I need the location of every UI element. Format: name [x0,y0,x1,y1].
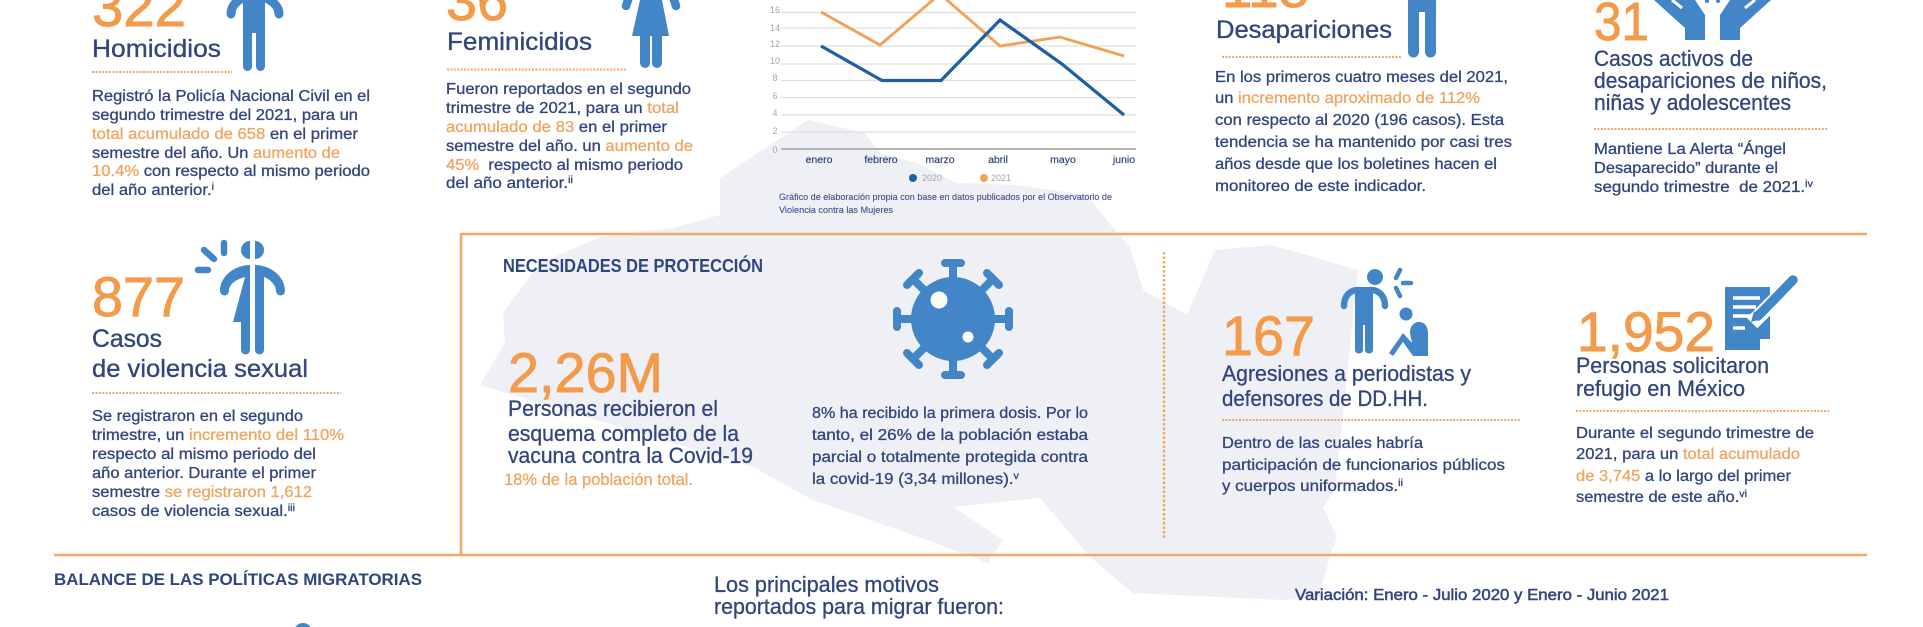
text: feminicidios description: acumulado de 83 en el primer [446,119,667,136]
heading: casos activos [1594,46,1827,115]
text: agresiones description: ii [1398,478,1403,489]
series 2020 [821,20,1124,115]
chart y axis labels: 8 [772,73,778,83]
icon: woman [626,0,676,68]
chart y axis labels: 2 [772,126,778,136]
heading: motivos: Los principales motivos [714,572,939,597]
text: homicidios description: Registró la Policía Nacional Civil en el [92,88,370,105]
icon: person head [294,623,312,627]
heading: feminicidios: Feminicidios [447,28,592,56]
chart y axis labels: 16 [770,5,780,15]
text: violencia description: año anterior. Durante el primer [92,465,316,482]
text: dosis description [812,405,1088,488]
chart y axis labels: 12 [770,39,780,49]
chart y axis labels: 10 [770,56,780,66]
text: feminicidios description: trimestre de 2021, para un total [446,100,679,117]
icon: virus [897,263,1009,375]
text: refugio description: de 3,745 a lo largo del primer [1576,468,1791,485]
text: feminicidios description: 45% respecto al mismo periodo [446,157,683,174]
icon: aggression [1344,269,1428,356]
panel frame: necesidades de protección [461,234,1867,555]
text: desapariciones description: un incremento aproximado de 112% [1215,90,1480,107]
text: refugio description [1576,425,1814,506]
background map of El Salvador [480,120,1358,600]
heading: violencia sexual: de violencia sexual [92,355,308,383]
text: homicidios description: total acumulado de 658 en el primer [92,126,358,143]
text: refugio description: vi [1739,489,1747,500]
text: dosis description: tanto, el 26% de la población estaba [812,427,1088,444]
panel: agresiones [1222,269,1520,495]
text: homicidios description: i [212,182,214,193]
chart y axis labels: 14 [770,23,780,33]
heading: casos activos: desapariciones de niños, [1594,68,1827,93]
text: feminicidios description [446,81,693,192]
panel: vacunación [504,341,753,489]
text: agresiones description: participación de funcionarios públicos [1222,457,1505,474]
heading: refugio [1576,353,1769,401]
panel: balance de las políticas migratorias [54,570,1669,627]
chart caption: Violencia contra las Mujeres [779,205,894,215]
heading: balance: BALANCE DE LAS POLÍTICAS MIGRATORIAS [54,570,422,589]
heading: agresiones [1222,361,1471,411]
chart y axis labels: 0 [772,145,778,155]
text: homicidios description: del año anterior. [92,182,203,199]
chart x axis labels: junio [1112,154,1135,166]
text: agresiones description [1222,435,1505,495]
text: porcentaje de población: 18% de la población total. [504,470,693,489]
heading: violencia sexual: Casos [92,325,162,353]
heading: vacunas: Personas recibieron el [508,396,718,421]
heading: violencia sexual [92,325,308,383]
text: agresiones description: y cuerpos uniformados. [1222,478,1383,495]
icon: person legs [1408,0,1436,58]
text: alerta description: segundo trimestre de 2021. [1594,179,1787,196]
text: desapariciones description: tendencia se ha mantenido por casi tres [1215,134,1512,151]
text: desapariciones description: En los primeros cuatro meses del 2021, [1215,69,1508,86]
text: desapariciones description: monitoreo de este indicador. [1215,178,1426,195]
icon: document and pen [1725,280,1794,351]
heading: vacunas: esquema completo de la [508,421,740,446]
text: dosis description: la covid-19 (3,34 millones). [812,471,997,488]
text: desapariciones description [1215,69,1512,195]
text: feminicidios description: Fueron reportados en el segundo [446,81,691,98]
text: desapariciones description: años desde que los boletines hacen el [1215,156,1497,173]
heading: necesidades de protección: NECESIDADES DE PROTECCIÓN [503,255,763,276]
text: dosis description: parcial o totalmente protegida contra [812,449,1088,466]
heading: casos activos: Casos activos de [1594,46,1753,71]
icon: violence person [198,241,285,354]
text: feminicidios description: del año anterior. [446,175,557,192]
text: violencia description [92,408,344,520]
text: violencia description: iii [288,503,295,514]
number: refugio: 1,952 [1577,300,1715,363]
text: agresiones description: Dentro de las cuales habría [1222,435,1423,452]
heading: refugio: Personas solicitaron [1576,353,1769,378]
text: refugio description: 2021, para un total acumulado [1576,446,1800,463]
heading: vacunas [508,396,753,468]
heading: desapariciones: Desapariciones [1216,16,1392,44]
heading: agresiones: defensores de DD.HH. [1222,386,1428,411]
panel: desapariciones [1215,0,1512,195]
heading: motivos: reportados para migrar fueron: [714,594,1004,619]
heading: homicidios: Homicidios [92,35,221,63]
text: refugio description: semestre de este año. [1576,489,1729,506]
text: violencia description: Se registraron en el segundo [92,408,303,425]
text: alerta description [1594,141,1813,196]
text: violencia description: trimestre, un incremento del 110% [92,427,344,444]
text: dosis description: 8% ha recibido la primera dosis. Por lo [812,405,1088,422]
series 2021 [821,0,1124,56]
text: violencia description: semestre se registraron 1,612 [92,484,312,501]
chart legend: 2021 [991,173,1011,183]
panel: alerta angel desaparecido [1594,0,1827,196]
text: feminicidios description: ii [568,175,573,186]
chart y axis labels [770,5,780,155]
text: homicidios description [92,88,370,199]
number: violencia sexual: 877 [92,265,185,328]
text: alerta description: Mantiene La Alerta “Ángel [1594,141,1786,158]
chart caption [779,192,1112,215]
text: violencia description: casos de violencia sexual. [92,503,272,520]
panel: refugio [1576,280,1829,506]
text: homicidios description: semestre del año. Un aumento de [92,145,340,162]
chart y axis labels: 6 [772,91,778,101]
chart x axis labels: mayo [1050,154,1076,166]
chart legend: 2020 [922,173,942,183]
panel: homicidios [92,0,370,199]
heading: motivos [714,572,1004,619]
text: refugio description: Durante el segundo trimestre de [1576,425,1814,442]
heading: casos activos: niñas y adolescentes [1594,90,1791,115]
panel: line chart feminicidios [770,0,1136,215]
text: feminicidios description: semestre del año. un aumento de [446,138,693,155]
text: violencia description: respecto al mismo periodo del [92,446,316,463]
chart x axis labels: abril [988,154,1008,166]
text: variación: Variación: Enero - Julio 2020 y Enero - Junio 2021 [1295,587,1669,604]
icon: person [231,0,279,71]
chart x axis labels: marzo [925,154,955,166]
chart x axis labels: febrero [864,154,898,166]
number: vacunas: 2,26M [508,341,663,404]
text: desapariciones description: con respecto al 2020 (196 casos). Esta [1215,112,1504,129]
text: homicidios description: 10.4% con respecto al mismo periodo [92,163,370,180]
heading: vacunas: vacuna contra la Covid-19 [508,443,753,468]
chart y axis labels: 4 [772,108,778,118]
heading: agresiones: Agresiones a periodistas y [1222,361,1471,386]
icon: hands [1654,0,1771,40]
heading: refugio: refugio en México [1576,376,1745,401]
chart caption: Gráfico de elaboración propia con base en datos publicados por el Observatorio de [779,192,1112,202]
chart x axis labels [806,154,1135,166]
panel: violencia sexual [92,241,344,520]
chart legend [909,173,1011,183]
text: homicidios description: segundo trimestre del 2021, para un [92,107,358,124]
chart x axis labels: enero [806,154,833,166]
panel: feminicidios [446,0,693,192]
number: agresiones: 167 [1222,304,1315,367]
text: alerta description: iv [1805,179,1813,190]
text: dosis description: v [1014,471,1019,482]
text: alerta description: Desaparecido” durante el [1594,160,1778,177]
